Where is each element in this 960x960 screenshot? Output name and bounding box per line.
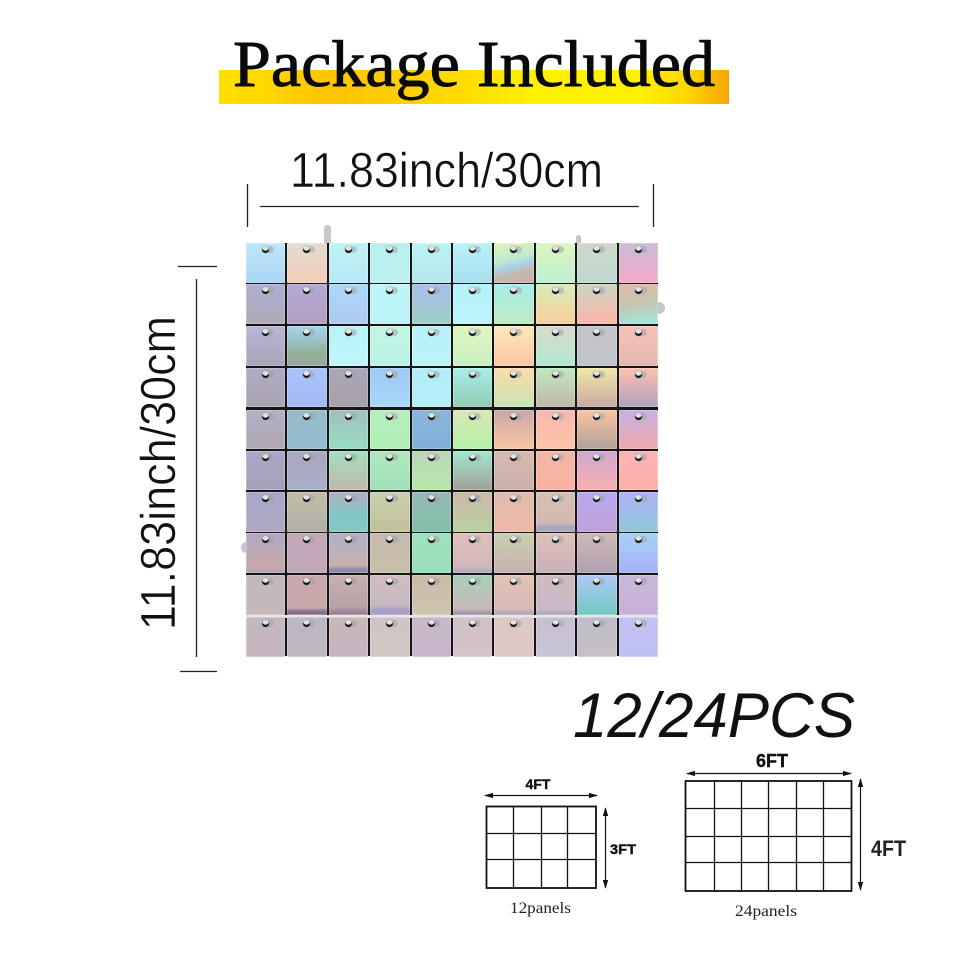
label 4FT right: 4FT: [871, 836, 906, 861]
icon: side clip right: [658, 302, 665, 314]
sequin row 2: [246, 284, 658, 324]
icon: hanging clip top right: [576, 235, 581, 243]
caption 24panels: 24panels: [735, 903, 797, 920]
gap between last two rows: [246, 615, 658, 618]
diagram: 24 panels: [685, 751, 906, 920]
width arrow 6FT: [687, 772, 851, 774]
quantity label: 12/24PCS: [573, 681, 855, 751]
title highlight bar: [219, 70, 729, 104]
height dimension lines: [178, 266, 217, 672]
sequin row 10: [246, 617, 658, 657]
panel: sequin wall panel: [246, 243, 658, 656]
sequin row 9: [246, 575, 658, 615]
12 panel grid: [486, 806, 596, 888]
sequin row 6: [246, 451, 658, 490]
sequin row 8: [246, 533, 658, 573]
diagram: 12 panels: [485, 776, 636, 917]
label 4FT: 4FT: [526, 776, 551, 792]
sequin row 4: [246, 368, 658, 407]
sequin row 5: [246, 410, 658, 449]
height dimension label: 11.83inch/30cm: [132, 316, 186, 630]
width arrow 4FT: [485, 794, 597, 796]
24 panel grid: [685, 781, 852, 891]
caption 12panels: 12panels: [510, 900, 571, 917]
width dimension lines: [248, 184, 654, 227]
label 3FT: 3FT: [610, 841, 636, 857]
label 6FT: 6FT: [756, 751, 788, 771]
height arrow 3FT: [604, 808, 606, 888]
title: Package Included: [233, 28, 715, 101]
icon: hanging clip top left: [324, 225, 331, 243]
width dimension label: 11.83inch/30cm: [290, 144, 603, 198]
sequin row 3: [246, 326, 658, 366]
sequin row 7: [246, 492, 658, 532]
height arrow 4FT: [860, 779, 862, 890]
icon: side clip left: [241, 542, 246, 553]
sequin row 1: [246, 243, 658, 283]
